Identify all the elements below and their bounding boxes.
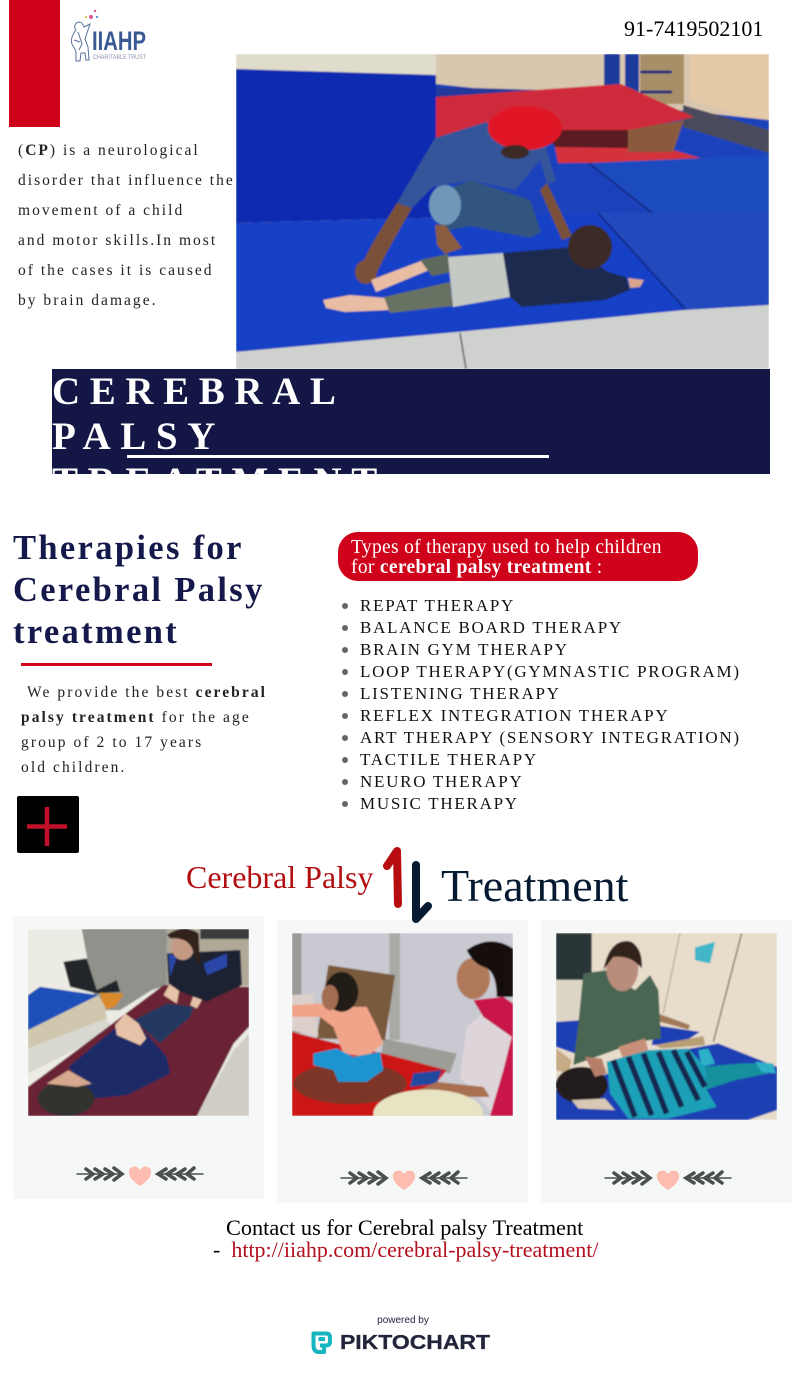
ornament: heart with branches (604, 1170, 732, 1190)
photo: therapist with patient on table (556, 933, 777, 1120)
therapies paragraph: group of 2 to 17 years (21, 734, 203, 751)
IIAHP logo (70, 10, 146, 62)
contact text: Contact us for Cerebral palsy Treatment (226, 1215, 583, 1240)
intro text: of the cases it is caused (18, 262, 214, 279)
red underline (21, 663, 212, 666)
panel: photo card 3 (541, 920, 792, 1203)
contact text: - http://iiahp.com/cerebral-palsy-treatment/ (213, 1237, 598, 1262)
ornament: heart with branches (76, 1166, 204, 1186)
therapy list: REFLEX INTEGRATION THERAPY (360, 706, 669, 725)
IIAHP logo: CHARITABLE TRUST (93, 55, 146, 61)
therapy list: LOOP THERAPY(GYMNASTIC PROGRAM) (360, 662, 741, 681)
intro text: (CP) is a neurological (18, 142, 200, 159)
therapies paragraph (21, 684, 267, 776)
therapy list: BRAIN GYM THERAPY (360, 640, 569, 659)
intro text: and motor skills.In most (18, 232, 217, 249)
ornament: heart with branches (340, 1170, 468, 1190)
piktochart footer logo: PIKTOCHART (340, 1332, 490, 1354)
callout: types of therapy: Types of therapy used to help children (351, 537, 662, 558)
therapy list: MUSIC THERAPY (360, 794, 519, 813)
title banner (52, 369, 770, 474)
heading: therapies: Cerebral Palsy (13, 571, 265, 609)
intro text: disorder that influence the (18, 172, 235, 189)
plus icon (17, 796, 79, 853)
heading: therapies: treatment (13, 613, 179, 651)
panel: photo card 1 (13, 916, 264, 1199)
label: Cerebral Palsy: Cerebral Palsy (186, 859, 374, 895)
panel: photo card 2 (277, 920, 528, 1203)
arrows up and down (383, 847, 432, 923)
heading: therapies: Therapies for (13, 529, 244, 567)
piktochart footer logo (312, 1315, 490, 1354)
piktochart footer logo: powered by (377, 1315, 429, 1326)
therapy list: BALANCE BOARD THERAPY (360, 618, 623, 637)
therapy list (342, 596, 741, 813)
therapy list: LISTENING THERAPY (360, 684, 561, 703)
photo: boy on maroon bed (28, 929, 249, 1116)
therapy list: REPAT THERAPY (360, 596, 515, 615)
therapies paragraph: palsy treatment for the age (21, 709, 251, 726)
therapies paragraph: old children. (21, 759, 126, 776)
contact text (213, 1215, 598, 1262)
phone number: 91-7419502101 (624, 16, 763, 41)
callout: types of therapy (338, 532, 698, 581)
therapy list: TACTILE THERAPY (360, 750, 538, 769)
photo: girl with therapist (292, 933, 513, 1116)
therapies paragraph: We provide the best cerebral (27, 684, 267, 701)
intro text: movement of a child (18, 202, 184, 219)
callout: types of therapy: for cerebral palsy treatment : (351, 557, 602, 578)
red corner block (9, 0, 60, 127)
hero photo: therapist with child on blue mats (236, 54, 769, 369)
intro text: by brain damage. (18, 292, 158, 309)
therapy list: ART THERAPY (SENSORY INTEGRATION) (360, 728, 741, 747)
intro text (18, 142, 235, 309)
therapy list: NEURO THERAPY (360, 772, 524, 791)
label: Treatment: Treatment (441, 860, 628, 911)
heading: therapies (13, 529, 265, 651)
